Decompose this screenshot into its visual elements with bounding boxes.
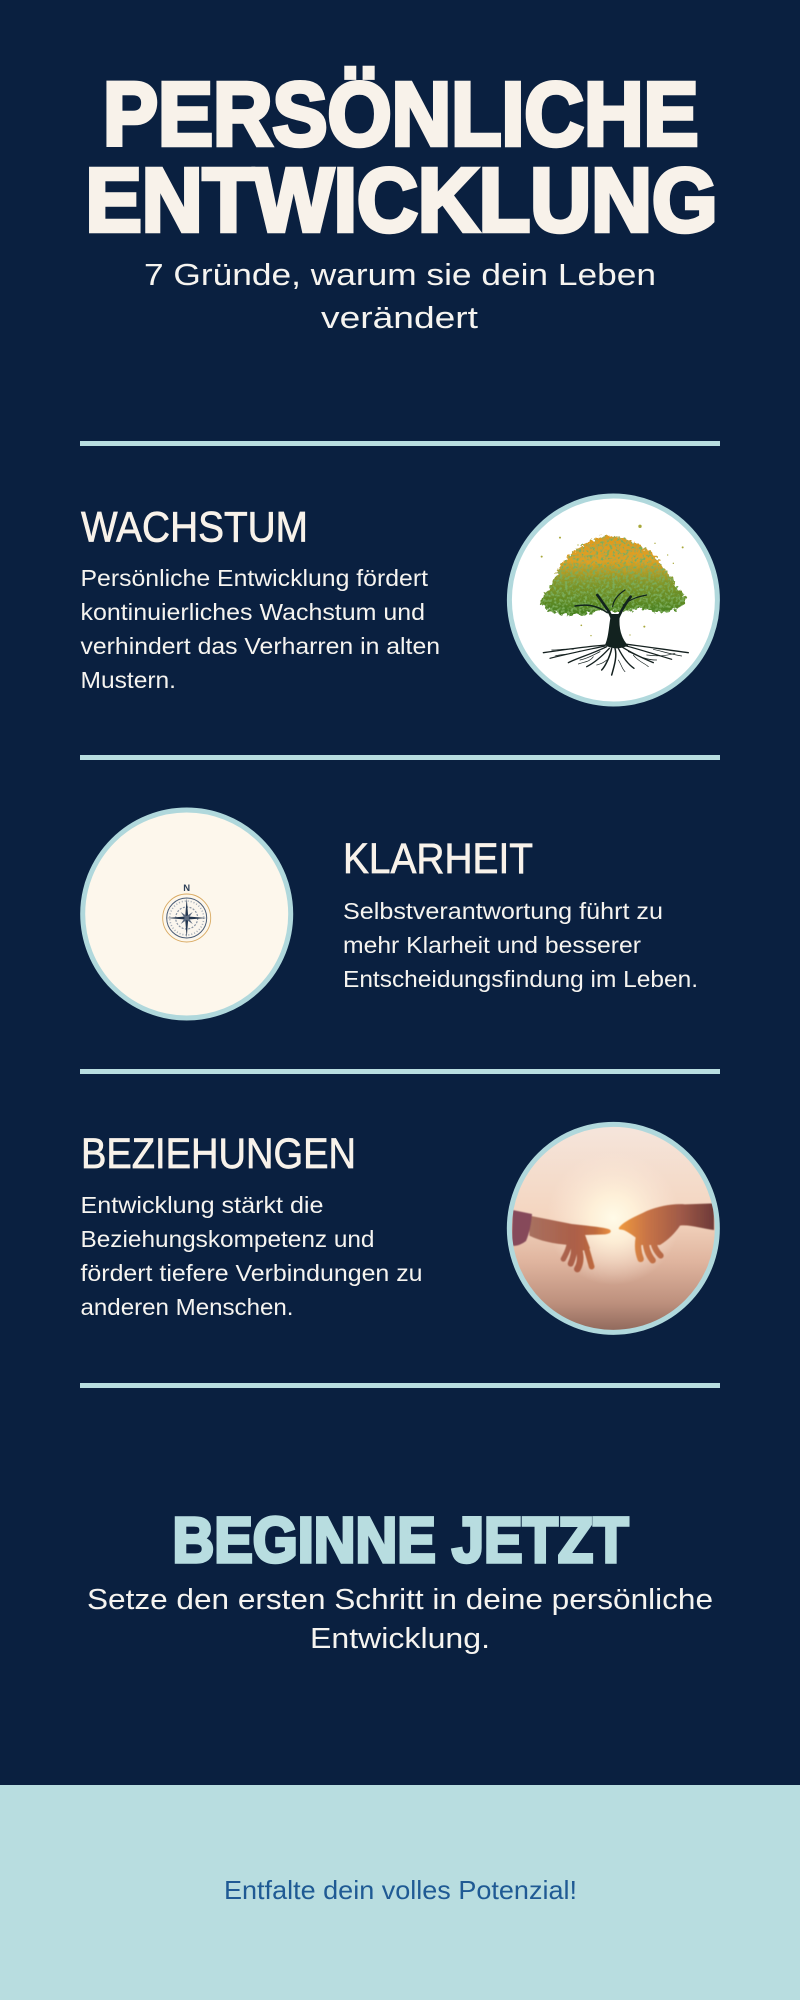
text block: Beziehungen [80,1192,422,1320]
icon: tree with roots [509,496,717,704]
title: PERSÖNLICHE [103,65,698,165]
text block: call to action [87,1584,713,1655]
text block: Beziehungen: fördert tiefere Verbindungen zu [80,1260,422,1286]
text block: Wachstum: verhindert das Verharren in alten [80,633,440,659]
text block: call to action: Entwicklung. [310,1623,490,1655]
text block: Klarheit [343,898,698,992]
text block: Klarheit: Entscheidungsfindung im Leben. [343,966,698,992]
heading: call to action: BEGINNE JETZT [172,1504,628,1576]
text block: Wachstum: Persönliche Entwicklung fördert [80,565,429,591]
subtitle [144,257,656,335]
panel: Klarheit [83,810,698,1018]
text block: call to action: Setze den ersten Schritt in deine persönliche [87,1584,713,1616]
footer text: Entfalte dein volles Potenzial! [224,1875,577,1905]
heading: Klarheit: KLARHEIT [343,835,533,883]
icon: compass [83,810,291,1018]
title: ENTWICKLUNG [86,151,718,251]
panel: Beziehungen [80,1122,720,1335]
text block: Klarheit: mehr Klarheit und besserer [343,932,641,958]
subtitle: 7 Gründe, warum sie dein Leben [144,257,656,292]
icon: compass: N [183,883,190,894]
text block: Wachstum: Mustern. [80,667,176,693]
text block: Beziehungen: anderen Menschen. [80,1294,294,1320]
text block: Beziehungen: Entwicklung stärkt die [80,1192,324,1218]
text block: Wachstum: kontinuierliches Wachstum und [80,599,425,625]
heading: Beziehungen: BEZIEHUNGEN [81,1130,356,1178]
heading: Wachstum: WACHSTUM [81,504,308,552]
text block: Klarheit: Selbstverantwortung führt zu [343,898,663,924]
icon: two reaching hands [507,1122,720,1335]
footer band [0,1785,800,2000]
title [86,65,718,251]
text block: Wachstum [80,565,440,693]
subtitle: verändert [321,300,478,335]
text block: Beziehungen: Beziehungskompetenz und [80,1226,374,1252]
panel: Wachstum [80,496,717,704]
